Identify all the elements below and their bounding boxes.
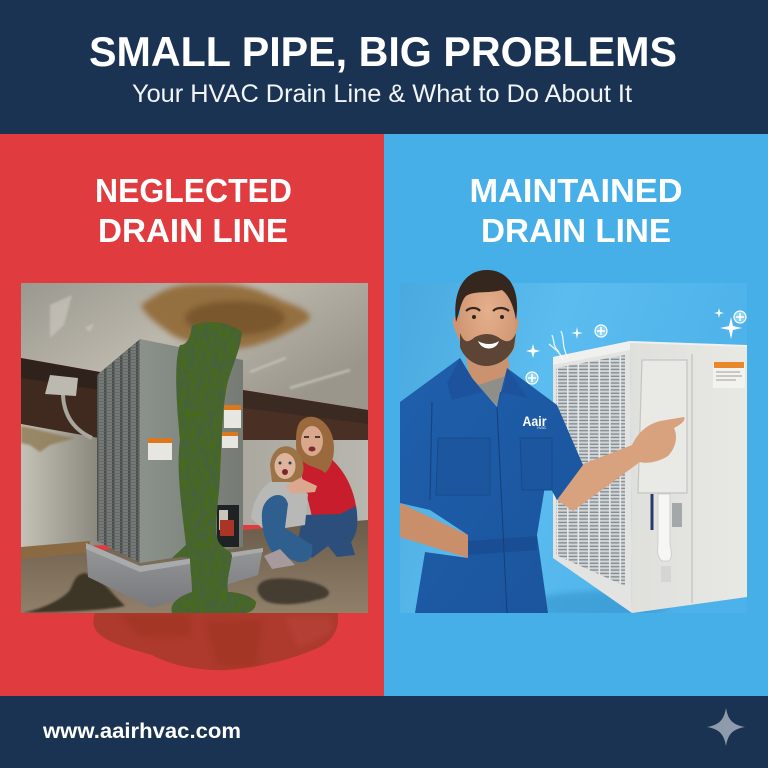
warning label bbox=[713, 362, 745, 388]
red reflected puddle bbox=[93, 613, 338, 670]
sparkles bbox=[526, 308, 746, 384]
company logo: Aair bbox=[522, 413, 547, 429]
footer band bbox=[0, 696, 768, 768]
collar bbox=[447, 358, 528, 407]
service panel bbox=[217, 505, 239, 547]
clean condenser unit bbox=[553, 341, 747, 613]
roof beams bbox=[21, 358, 110, 440]
neglected heading bbox=[95, 172, 292, 249]
sleeve seam bbox=[430, 402, 432, 500]
maintained heading: DRAIN LINE bbox=[481, 212, 671, 249]
neck bbox=[463, 340, 510, 405]
right arm and pointing hand bbox=[557, 417, 685, 511]
coverall bbox=[400, 358, 583, 613]
head bbox=[453, 270, 518, 366]
neglected heading: DRAIN LINE bbox=[98, 212, 288, 249]
subtitle: Your HVAC Drain Line & What to Do About It bbox=[132, 80, 632, 108]
icon: four-point star bbox=[707, 708, 745, 746]
frightened child bbox=[251, 446, 317, 569]
header band bbox=[0, 0, 768, 134]
technician bbox=[400, 270, 685, 613]
waist band bbox=[468, 536, 537, 555]
green slime cascade bbox=[172, 322, 256, 613]
pockets bbox=[436, 438, 552, 495]
white drain pipe bbox=[652, 494, 682, 582]
maintained heading bbox=[470, 172, 682, 249]
warning labels bbox=[148, 405, 241, 460]
company logo: HVAC bbox=[537, 426, 547, 430]
floor shadow bbox=[530, 591, 670, 619]
left forearm bbox=[400, 503, 468, 558]
baseboard bbox=[21, 541, 90, 559]
panel: maintained drain line bbox=[384, 134, 768, 696]
button placket bbox=[497, 407, 507, 613]
photo: technician with clean unit bbox=[400, 270, 747, 619]
photo: flooded attic unit with frightened family bbox=[21, 283, 368, 613]
access panel bbox=[638, 360, 687, 493]
fresh air squiggles bbox=[549, 331, 568, 360]
title: SMALL PIPE, BIG PROBLEMS bbox=[89, 28, 677, 75]
floor bbox=[21, 520, 368, 613]
seam bbox=[691, 354, 693, 603]
electrical box and conduit bbox=[45, 375, 92, 438]
maintained heading: MAINTAINED bbox=[470, 172, 682, 209]
ceiling bbox=[21, 283, 368, 410]
drip tray bbox=[86, 543, 263, 608]
unit front bbox=[140, 339, 243, 563]
neglected heading: NEGLECTED bbox=[95, 172, 292, 209]
ceiling water stain bbox=[141, 284, 310, 348]
unit louvered side bbox=[97, 339, 140, 563]
gray undershirt bbox=[478, 376, 506, 407]
walls bbox=[21, 424, 110, 548]
website url: www.aairhvac.com bbox=[42, 720, 241, 743]
panel: neglected drain line bbox=[0, 134, 384, 696]
photo background bbox=[400, 283, 747, 613]
frightened mother bbox=[296, 417, 357, 558]
